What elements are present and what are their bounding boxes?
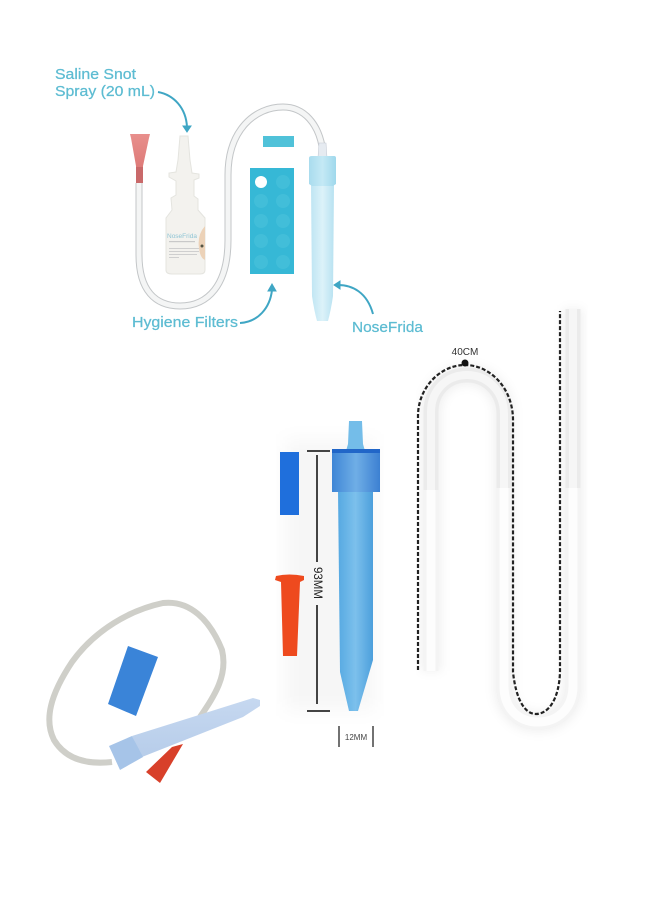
icon: blue filter xyxy=(280,452,299,515)
label: Hygiene Filters: Hygiene Filters xyxy=(132,314,238,331)
icon: red rubber tip xyxy=(130,134,150,183)
dimension: 93MM xyxy=(307,451,330,711)
dimension: 93MM: 93MM xyxy=(311,567,323,599)
label: Saline Snot Spray (20 mL): Saline Snot xyxy=(55,66,137,83)
icon: hygiene filter sheet xyxy=(250,168,294,274)
tube: grey loop xyxy=(49,603,223,763)
icon: red tip xyxy=(146,744,183,783)
icon: translucent collection tube xyxy=(109,698,260,770)
group: annotated kit photo xyxy=(55,66,424,336)
group: long tube with 40CM length xyxy=(418,309,573,722)
label: Saline Snot Spray (20 mL): Spray (20 mL) xyxy=(55,83,155,100)
group: assembled aspirator photo xyxy=(49,603,260,783)
group: blue aspirator parts with dimensions xyxy=(275,421,380,747)
icon: red tip xyxy=(275,574,304,656)
icon: blue collection tube xyxy=(332,421,380,711)
icon: saline spray bottle: NoseFrida xyxy=(167,233,197,240)
dimension: 12MM: 12MM xyxy=(345,733,367,742)
label: Saline Snot Spray (20 mL) xyxy=(55,66,155,100)
arrow: to filters xyxy=(240,284,276,323)
icon: small hygiene filter xyxy=(263,136,294,147)
icon: measure dot xyxy=(462,360,468,366)
icon: saline spray bottle xyxy=(166,136,205,274)
tube: U-shaped silicone tube xyxy=(431,309,573,722)
measure line: dashed 40CM path xyxy=(418,311,560,714)
shadow: soft shadow behind parts xyxy=(285,440,375,710)
tube: clear aspirator tube xyxy=(139,107,322,306)
arrow: to spray xyxy=(158,92,191,132)
arrow: to NoseFrida xyxy=(334,281,373,314)
icon: NoseFrida collection tube xyxy=(309,143,336,321)
label: NoseFrida: NoseFrida xyxy=(352,319,424,336)
label: 40CM: 40CM xyxy=(452,347,478,358)
icon: blue filter xyxy=(108,646,158,716)
dimension: 12MM xyxy=(339,726,373,747)
